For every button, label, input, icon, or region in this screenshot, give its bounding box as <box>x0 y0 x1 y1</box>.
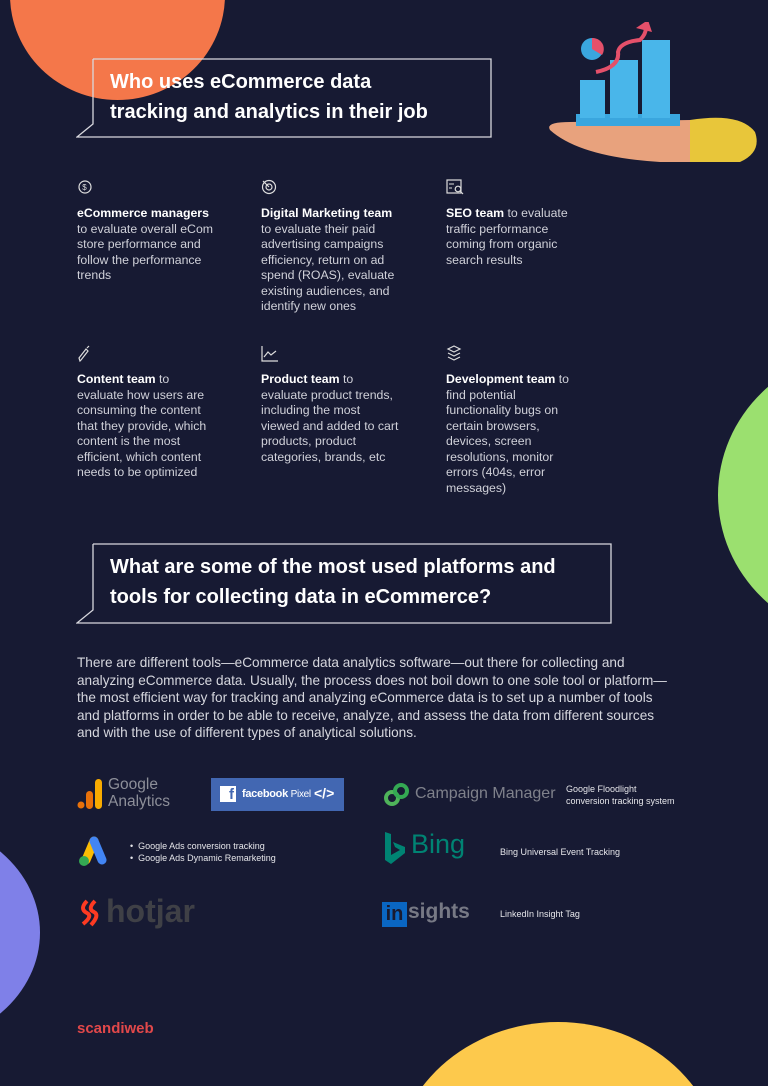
logo: facebook pixel <box>211 778 344 811</box>
decorative circle: yellow <box>422 1022 694 1086</box>
item: Content team <box>77 346 206 479</box>
icon: pen <box>78 346 90 362</box>
intro paragraph: There are different tools—eCommerce data analytics software—out there for collecting and <box>77 655 625 670</box>
item: Development team: Development team to <box>446 372 569 386</box>
item: eCommerce managers: to evaluate overall eCom <box>77 222 213 236</box>
heading box 2 <box>76 543 612 624</box>
intro paragraph: analyzing eCommerce data. Usually, the process does not boil down to one sole tool or platform— <box>77 672 667 688</box>
title 1 <box>110 71 428 123</box>
item: Development team: functionality bugs on <box>446 403 558 417</box>
heading box 1 <box>76 58 492 138</box>
item: SEO team <box>446 179 568 266</box>
note: floodlight <box>566 784 675 806</box>
item: Product team: products, product <box>261 434 356 448</box>
item: Content team: consuming the content <box>77 403 201 417</box>
logo: Bing: Bing <box>411 829 465 859</box>
note: floodlight: conversion tracking system <box>566 796 675 806</box>
item: Product team: viewed and added to cart <box>261 418 398 432</box>
item: Digital Marketing: existing audiences, and <box>261 284 390 298</box>
logo: Google Analytics <box>78 776 170 810</box>
decorative circle: green <box>718 387 768 603</box>
item: Product team: including the most <box>261 403 360 417</box>
item: Content team: needs to be optimized <box>77 465 197 479</box>
item: Digital Marketing <box>261 180 394 313</box>
logo: Campaign Manager: Campaign Manager <box>415 785 556 802</box>
item: Digital Marketing: spend (ROAS), evaluate <box>261 268 394 282</box>
logo: Bing <box>385 829 465 864</box>
note: linkedin: LinkedIn Insight Tag <box>500 909 580 919</box>
item: Product team: categories, brands, etc <box>261 450 385 464</box>
intro paragraph <box>77 655 667 740</box>
item: eCommerce managers: follow the performance <box>77 252 201 266</box>
item: Digital Marketing: identify new ones <box>261 299 356 313</box>
item: Development team: messages) <box>446 480 506 494</box>
intro paragraph: the most efficient way for tracking and analyzing eCommerce data is to set up a number of tools <box>77 690 653 705</box>
item: Content team: efficient, which content <box>77 450 201 464</box>
item: Product team: evaluate product trends, <box>261 388 393 402</box>
icon: dollar cycle <box>78 180 92 194</box>
logo: Google Analytics: Analytics <box>108 793 170 810</box>
logo: facebook pixel: </> <box>314 785 334 801</box>
item: Product team: Product team to <box>261 372 353 386</box>
logo: Google Ads <box>79 836 106 866</box>
item: Development team: devices, screen <box>446 434 531 448</box>
item: eCommerce managers <box>77 180 213 282</box>
note: google ads bullets: • Google Ads conversion tracking <box>130 841 265 851</box>
item: Development team: certain browsers, <box>446 418 540 432</box>
item: Content team: evaluate how users are <box>77 388 204 402</box>
decorative circle: orange <box>10 0 225 100</box>
item: Digital Marketing: advertising campaigns <box>261 237 383 251</box>
item: Content team: that they provide, which <box>77 418 206 432</box>
logo: LinkedIn insights <box>382 900 470 927</box>
icon: layers <box>446 345 462 361</box>
item: Digital Marketing: to evaluate their paid <box>261 222 375 236</box>
intro paragraph: and with the use of different types of analytical solutions. <box>77 725 417 740</box>
logo: hotjar: hotjar <box>106 893 195 929</box>
item: SEO team: coming from organic <box>446 237 557 251</box>
note: bing: Bing Universal Event Tracking <box>500 847 620 857</box>
item: Content team: Content team to <box>77 372 169 386</box>
logo: Google Analytics: Google <box>108 776 158 793</box>
title 2: What are some of the most used platforms and <box>110 556 556 578</box>
item: eCommerce managers: store performance and <box>77 237 201 251</box>
note: floodlight: Google Floodlight <box>566 784 637 794</box>
title 2 <box>110 556 556 608</box>
icon: target <box>262 180 276 194</box>
logo: facebook pixel: f <box>229 786 234 803</box>
item: Development team: find potential <box>446 388 516 402</box>
icon: dollar cycle: $ <box>82 183 87 192</box>
note: google ads bullets <box>130 841 276 863</box>
decorative circle: purple <box>0 852 40 1014</box>
item: Development team: resolutions, monitor <box>446 450 553 464</box>
illustration: hand with chart <box>549 22 757 162</box>
item: Content team: content is the most <box>77 434 180 448</box>
item: eCommerce managers: eCommerce managers <box>77 206 209 220</box>
logo: LinkedIn insights: in <box>386 903 403 925</box>
logo: LinkedIn insights: sights <box>408 900 470 923</box>
icon: line chart <box>261 346 278 362</box>
item: SEO team: SEO team to evaluate <box>446 206 568 220</box>
logo: facebook pixel: facebook Pixel <box>242 788 311 800</box>
title 1: Who uses eCommerce data <box>110 71 371 93</box>
logo: Campaign Manager <box>384 783 556 806</box>
intro paragraph: and platforms in order to be able to receive, analyze, and assess the data from different sources <box>77 708 654 722</box>
item: Product team <box>261 346 398 464</box>
brand logo: scandiweb: scandiweb <box>77 1020 154 1037</box>
title 2: tools for collecting data in eCommerce? <box>110 586 491 608</box>
item: Digital Marketing: efficiency, return on ad <box>261 252 384 266</box>
item: Development team <box>446 345 569 494</box>
item: eCommerce managers: trends <box>77 268 111 282</box>
icon: search doc <box>446 179 464 194</box>
item: SEO team: search results <box>446 252 523 266</box>
item: SEO team: traffic performance <box>446 222 548 236</box>
note: google ads bullets: • Google Ads Dynamic Remarketing <box>130 853 276 863</box>
item: Development team: errors (404s, error <box>446 465 545 479</box>
title 1: tracking and analytics in their job <box>110 101 428 123</box>
item: Digital Marketing: Digital Marketing team <box>261 206 392 220</box>
